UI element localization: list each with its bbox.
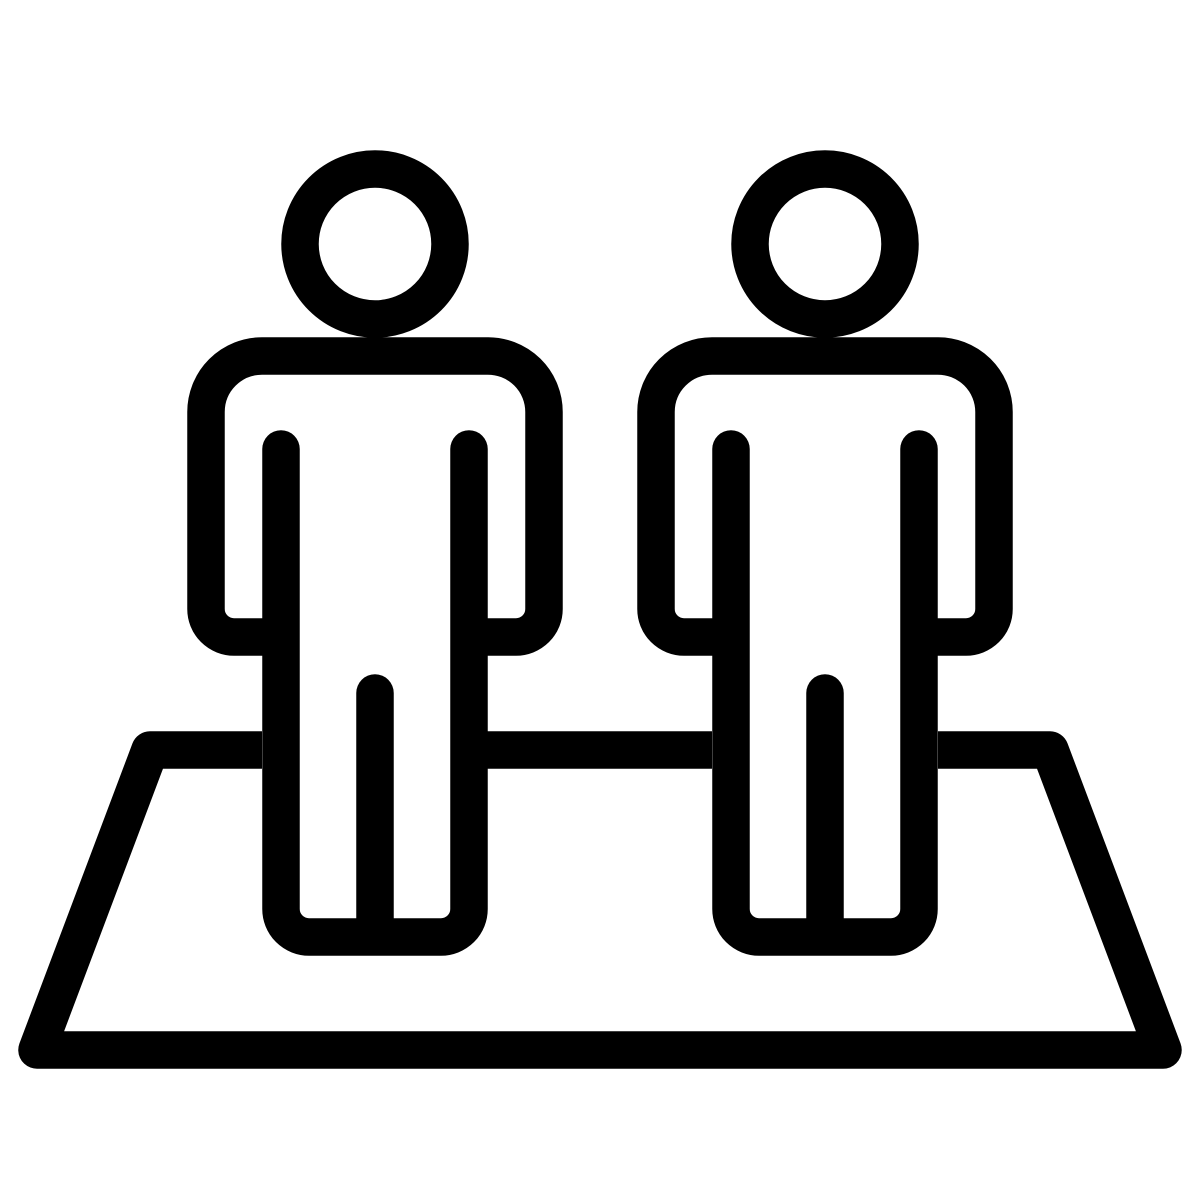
- leg divider: [806, 693, 844, 925]
- leg divider: [356, 693, 394, 925]
- legs: [281, 449, 469, 937]
- icon: platform: [37, 750, 1163, 1050]
- icon: right person: [656, 169, 994, 937]
- head: [750, 169, 900, 319]
- head: [300, 169, 450, 319]
- legs: [731, 449, 919, 937]
- body and arms: [656, 356, 994, 637]
- icon: left person: [206, 169, 544, 937]
- body and arms: [206, 356, 544, 637]
